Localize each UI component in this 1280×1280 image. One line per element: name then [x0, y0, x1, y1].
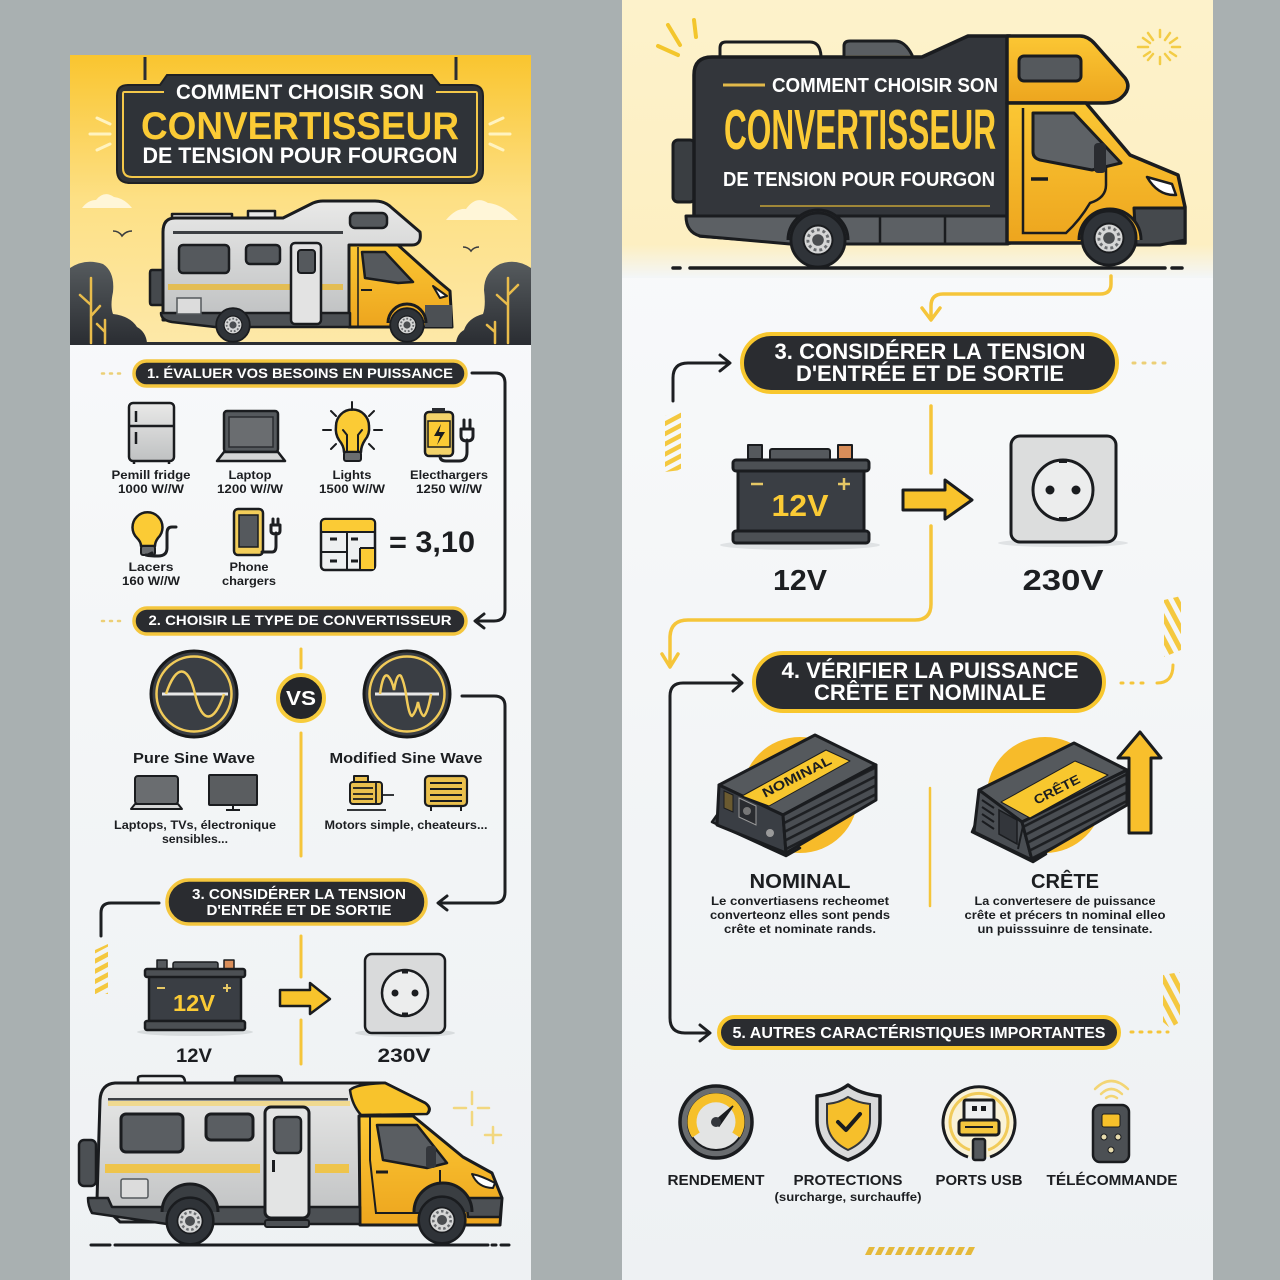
label: pure sine wave: Pure Sine Wave	[133, 750, 255, 767]
ground line	[91, 1244, 509, 1246]
label: télécommande: TÉLÉCOMMANDE	[1046, 1172, 1178, 1189]
icon: motor	[347, 776, 394, 810]
label: crete: La convertesere de puissance	[974, 896, 1156, 908]
icon: battery	[137, 960, 253, 1036]
label: ports USB: PORTS USB	[936, 1172, 1023, 1189]
right header background	[622, 0, 1213, 278]
header base line	[70, 342, 531, 345]
section heading 4: CRÊTE ET NOMINALE	[814, 680, 1046, 705]
hatch accent	[95, 944, 108, 994]
section heading 3	[167, 880, 426, 924]
label: phone chargers: chargers	[222, 574, 276, 588]
label: lacers: 160 W//W	[122, 574, 181, 588]
camper van with title: DE TENSION POUR FOURGON	[723, 169, 995, 191]
label: phone chargers	[222, 560, 276, 588]
connector into heading 3	[673, 355, 730, 401]
label: 230V right: 230V	[1022, 565, 1104, 597]
section heading 3 right: 3. CONSIDÉRER LA TENSION	[774, 339, 1086, 364]
comparison divider	[300, 649, 302, 856]
long connector	[670, 675, 742, 1041]
ground line right	[673, 266, 1182, 270]
connector from heading 3	[101, 903, 159, 936]
label: rendement: RENDEMENT	[668, 1172, 764, 1189]
sparks left	[658, 20, 696, 55]
icon: socket	[355, 954, 455, 1037]
connector 1 to 2	[472, 373, 505, 628]
label: 12V: 12V	[176, 1046, 212, 1067]
label: nominal: Le convertiasens recheomet	[711, 896, 889, 908]
hatch right top	[1164, 596, 1181, 657]
label: laptop: 1200 W//W	[217, 482, 284, 496]
icon: battery charger	[425, 408, 473, 461]
camper van with title: CONVERTISSEUR	[724, 98, 996, 162]
label: 12V right: 12V	[773, 565, 828, 597]
divider 3 right	[929, 406, 933, 473]
text: pure sine uses: Laptops, TVs, électronique	[114, 820, 276, 832]
clouds	[82, 194, 518, 220]
icon: battery: 12V	[173, 990, 216, 1016]
section heading 2	[134, 608, 466, 634]
icon: TV	[209, 775, 257, 810]
connector 2 to 3	[438, 696, 505, 910]
icon: socket right	[998, 436, 1128, 547]
label: nominal: converteonz elles sont pends	[710, 910, 890, 922]
label: crete: un puisssuinre de tensinate.	[978, 924, 1152, 936]
icon: peak inverter	[972, 732, 1161, 862]
icon: nominal inverter: NOMINAL	[760, 753, 834, 800]
text: pure sine uses	[114, 820, 276, 846]
icon: laptop small	[131, 776, 182, 809]
icon: calculator	[321, 519, 375, 570]
sparkles	[454, 1092, 501, 1143]
section heading 2: 2. CHOISIR LE TYPE DE CONVERTISSEUR	[148, 612, 452, 628]
title sign: CONVERTISSEUR	[141, 105, 459, 148]
label: electrical chargers: 1250 W//W	[416, 482, 483, 496]
divider inverters	[929, 788, 931, 906]
section heading 3 right	[742, 334, 1117, 392]
label: nominal	[710, 871, 890, 936]
sun right	[1138, 30, 1180, 64]
camper van (large)	[79, 1076, 502, 1244]
label: laptop	[217, 468, 284, 496]
section heading 4: 4. VÉRIFIER LA PUISSANCE	[782, 658, 1078, 683]
icon: gauge	[680, 1086, 752, 1158]
section heading 5: 5. AUTRES CARACTÉRISTIQUES IMPORTANTES	[732, 1023, 1106, 1042]
icon: pure sine wave	[151, 651, 237, 737]
label: modified sine wave: Modified Sine Wave	[330, 750, 482, 767]
left header background	[70, 55, 531, 344]
label: protections: (surcharge, surchauffe)	[774, 1190, 922, 1204]
sign sparks	[90, 118, 510, 150]
label: lights: 1500 W//W	[319, 482, 386, 496]
label: electrical chargers: Electhargers	[410, 468, 488, 482]
icon: small bulb with cord	[133, 512, 176, 556]
icon: remote control	[1093, 1081, 1129, 1162]
icon: fridge	[129, 403, 174, 464]
icon: USB port	[943, 1087, 1015, 1160]
connector: van to step 3	[922, 276, 1111, 320]
label: electrical chargers	[410, 468, 488, 496]
hatch right bottom	[1163, 972, 1180, 1028]
label: nominal: NOMINAL	[750, 871, 850, 893]
camper van with title	[673, 36, 1185, 267]
total value: = 3,10	[389, 526, 475, 559]
section heading 5	[719, 1017, 1119, 1048]
hatch left	[665, 409, 681, 472]
title sign: COMMENT CHOISIR SON	[176, 81, 424, 104]
trees	[70, 262, 531, 343]
panel: left infographic	[70, 55, 531, 1280]
label: crete: CRÊTE	[1031, 869, 1099, 893]
arrow: 12V to 230V	[280, 983, 330, 1014]
text: modified sine uses: Motors simple, cheateurs...	[324, 820, 488, 832]
section heading 1: 1. ÉVALUER VOS BESOINS EN PUISSANCE	[147, 365, 453, 381]
label: lacers: Lacers	[128, 560, 174, 574]
icon: phone charger	[234, 509, 280, 555]
dots 2	[102, 620, 125, 622]
dots 5	[1131, 1030, 1168, 1034]
divider 3	[300, 936, 302, 1064]
label: phone chargers: Phone	[230, 560, 269, 574]
icon: laptop	[217, 411, 285, 461]
title sign: DE TENSION POUR FOURGON	[142, 143, 458, 168]
label: laptop: Laptop	[228, 468, 272, 482]
icon: light bulb	[323, 402, 382, 461]
text: pure sine uses: sensibles...	[162, 834, 228, 846]
section heading 3: D'ENTRÉE ET DE SORTIE	[206, 902, 392, 919]
label: protections: PROTECTIONS	[794, 1172, 902, 1189]
dots 3 right	[1133, 362, 1170, 364]
birds	[113, 231, 479, 251]
label: crete: crête et précers tn nominal elleo	[964, 910, 1166, 922]
icon: modified sine wave	[364, 651, 450, 737]
section heading 3 right: D'ENTRÉE ET DE SORTIE	[796, 361, 1064, 386]
footer hatch	[865, 1247, 975, 1255]
label: nominal: crête et nominate rands.	[724, 924, 876, 936]
connector: step 3 to step 4	[662, 526, 931, 667]
label: fridge: Pemill fridge	[112, 468, 191, 482]
icon: battery right: 12V	[772, 488, 829, 523]
icon: VS badge	[278, 675, 324, 721]
label: 230V: 230V	[378, 1046, 431, 1067]
camper van (small)	[150, 201, 452, 342]
icon: battery right	[720, 445, 880, 550]
label: fridge	[112, 468, 191, 496]
label: crete	[964, 869, 1166, 936]
connector curve to hatch	[1157, 665, 1173, 683]
section heading 1	[134, 361, 466, 386]
section heading 3: 3. CONSIDÉRER LA TENSION	[192, 886, 406, 903]
arrow: 12V to 230V right	[903, 480, 972, 519]
camper van with title: COMMENT CHOISIR SON	[772, 75, 998, 97]
dots and curve to hatch	[1121, 682, 1150, 684]
title sign	[117, 75, 483, 183]
icon: heater	[425, 776, 467, 811]
panel: right infographic	[622, 0, 1213, 1280]
section heading 4	[754, 653, 1104, 711]
label: lights: Lights	[332, 468, 372, 482]
icon: peak inverter: CRÊTE	[1031, 771, 1083, 808]
label: lacers	[122, 560, 181, 588]
icon: nominal inverter	[712, 735, 876, 856]
label: lights	[319, 468, 386, 496]
dots 1	[102, 372, 125, 375]
sign hanging posts	[145, 57, 456, 80]
icon: shield	[817, 1085, 880, 1160]
label: protections	[774, 1172, 922, 1204]
label: fridge: 1000 W//W	[118, 482, 185, 496]
icon: VS badge: VS	[286, 688, 316, 710]
